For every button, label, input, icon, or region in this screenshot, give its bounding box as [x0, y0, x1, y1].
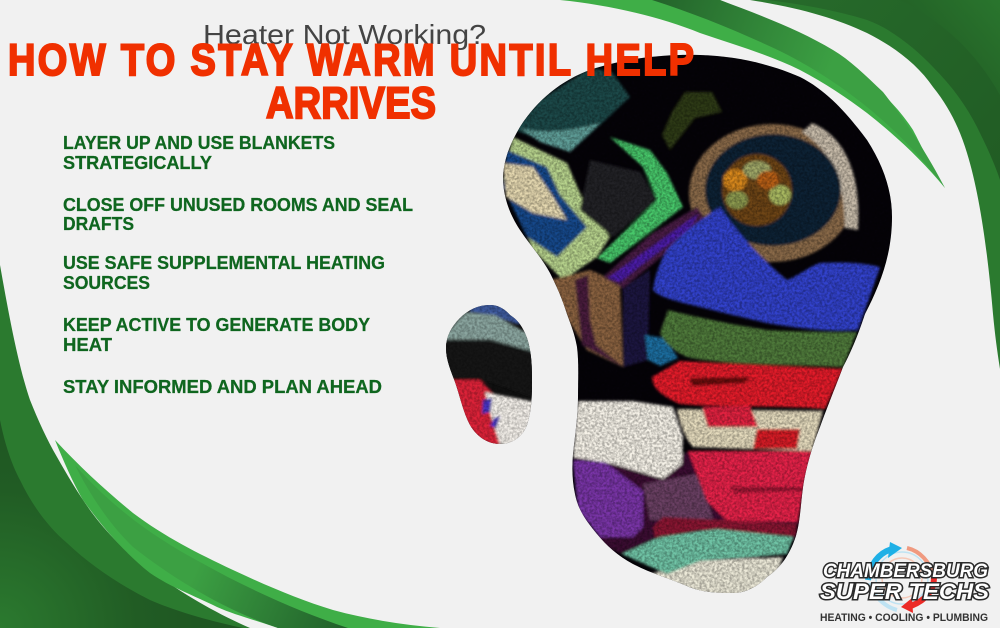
- title: [8, 35, 694, 128]
- blue yarn tufts: [482, 398, 500, 428]
- cream base knit: [650, 557, 783, 595]
- green swoosh: bottom left corner: [0, 265, 440, 628]
- mint knit: [622, 529, 793, 574]
- logo wordmark: CHAMBERSBURG: [823, 561, 988, 582]
- logo wordmark: SUPER TECHS: [820, 579, 989, 604]
- teal blanket: [515, 68, 630, 152]
- blue knit: [653, 207, 880, 331]
- tip 3: USE SAFE SUPPLEMENTAL HEATING: [63, 253, 385, 273]
- dark red knit: [653, 517, 797, 538]
- red knit: [454, 378, 502, 444]
- white knit: [573, 401, 683, 479]
- logo wordmark: [820, 561, 989, 604]
- logo circle and arrows: [868, 542, 934, 613]
- tips list: [63, 133, 413, 397]
- dark maroon underlay in the lower stack: [573, 449, 804, 562]
- title: ARRIVES: [266, 78, 436, 128]
- round motif: [689, 123, 859, 262]
- bright green ring: [597, 137, 683, 263]
- crimson knit: [688, 451, 812, 522]
- tip 1: STRATEGICALLY: [63, 153, 212, 173]
- logo: Chambersburg Super Techs: [820, 542, 989, 624]
- blue top edge: [468, 305, 520, 326]
- tip 4: KEEP ACTIVE TO GENERATE BODY: [63, 315, 370, 335]
- grey knit: [440, 312, 535, 352]
- tip 3: [63, 253, 385, 293]
- tip 5: STAY INFORMED AND PLAN AHEAD: [63, 377, 382, 397]
- purple knit: [573, 460, 643, 537]
- logo tagline: HEATING • COOLING • PLUMBING: [820, 612, 988, 624]
- red knit: [652, 361, 843, 409]
- tip 4: [63, 315, 370, 355]
- title: HOW TO STAY WARM UNTIL HELP: [8, 35, 694, 85]
- tip 3: SOURCES: [63, 273, 150, 293]
- tip 4: HEAT: [63, 335, 112, 355]
- tip 2: DRAFTS: [63, 214, 134, 234]
- knit texture overlay: [500, 50, 900, 600]
- maroon and brown panel: [550, 207, 706, 367]
- cream and red folded knit: [677, 406, 823, 451]
- tip 2: CLOSE OFF UNUSED ROOMS AND SEAL: [63, 195, 413, 215]
- small photo blob: [446, 305, 532, 444]
- faint olive crochet: [662, 92, 722, 150]
- granny square with blue and cream: [503, 137, 610, 280]
- green knit: [660, 310, 857, 367]
- black knit: [440, 342, 535, 398]
- tip 1: [63, 133, 335, 173]
- photo blob: stacked crochet blankets: [500, 50, 900, 600]
- tip 2: [63, 195, 413, 234]
- mauve knit: [643, 474, 713, 520]
- green swoosh: top right corner: [560, 0, 1000, 369]
- tip 1: LAYER UP AND USE BLANKETS: [63, 133, 335, 153]
- white knit: [485, 392, 535, 445]
- small teal fold: [645, 335, 678, 366]
- dark crochet hole: [580, 160, 657, 237]
- subtitle: Heater Not Working?: [203, 19, 486, 50]
